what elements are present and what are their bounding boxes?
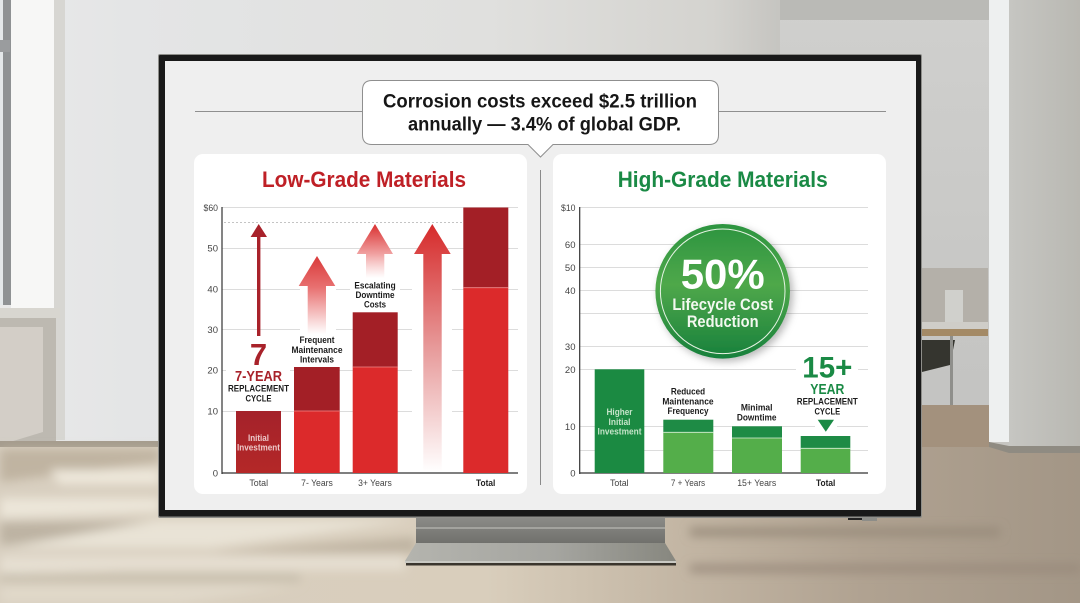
- label: reduced maintenance frequency: Reduced: [671, 386, 705, 396]
- header rule: [195, 110, 886, 112]
- label: escalating downtime costs: Escalating: [354, 280, 396, 290]
- window: [0, 0, 65, 440]
- arrow: maintenance: [299, 256, 335, 334]
- right column: [989, 0, 1080, 453]
- badge: 50% lifecycle cost reduction: Lifecycle Cost: [672, 296, 774, 314]
- callout: 7-year replacement cycle: REPLACEMENT: [228, 384, 289, 394]
- low-grade x axis labels: [249, 478, 495, 489]
- label: escalating downtime costs: [354, 280, 396, 310]
- label: minimal downtime: Downtime: [737, 413, 777, 423]
- callout: 7-year replacement cycle: [228, 337, 289, 404]
- screen: [165, 61, 916, 510]
- low-grade x axis labels: Total: [476, 478, 495, 489]
- center divider: [540, 170, 542, 485]
- label: escalating downtime costs: Downtime: [356, 290, 394, 300]
- rear room: [780, 0, 990, 420]
- high-grade x axis labels: 15+ Years: [737, 478, 776, 489]
- bar: initial investment: Investment: [237, 442, 281, 454]
- bar: 7+ years: [663, 420, 713, 473]
- panel: low-grade materials: [194, 154, 527, 494]
- high-grade x axis labels: [610, 478, 835, 489]
- label: minimal downtime: [737, 403, 777, 423]
- high-grade y axis labels: 60: [565, 240, 576, 251]
- knockout behind labels: [226, 254, 452, 472]
- low-grade x axis labels: 7- Years: [301, 478, 333, 489]
- high-grade y axis labels: 20: [565, 365, 576, 376]
- callout: corrosion cost headline: [362, 80, 718, 157]
- low-grade y axis labels: 10: [207, 406, 218, 418]
- callout: 15+ year replacement cycle: REPLACEMENT: [797, 396, 858, 406]
- high-grade x axis labels: Total: [610, 478, 629, 489]
- callout: 7-year replacement cycle: CYCLE: [246, 394, 272, 404]
- monitor frame: [158, 54, 922, 521]
- high-grade y axis labels: $10: [561, 203, 576, 214]
- high-grade x axis labels: Total: [816, 478, 835, 489]
- high-grade x axis labels: 7 + Years: [671, 478, 705, 489]
- low-grade y axis labels: 20: [207, 366, 218, 376]
- label: frequent maintenance intervals: Intervals: [300, 354, 334, 364]
- low-grade y axis labels: [204, 203, 218, 480]
- callout: 15+ year replacement cycle: [796, 351, 858, 432]
- low-grade gridlines and axis: [222, 207, 518, 474]
- badge: 50% lifecycle cost reduction: Reduction: [687, 313, 759, 331]
- badge: 50% lifecycle cost reduction: [655, 224, 790, 359]
- bar: 3+ years: [353, 312, 398, 473]
- label: frequent maintenance intervals: Maintenance: [292, 345, 342, 355]
- monitor stand: [405, 518, 676, 566]
- bar: initial investment: Initial: [248, 433, 269, 444]
- badge: 50% lifecycle cost reduction: 50%: [681, 250, 765, 298]
- low-grade title: Low-Grade Materials: [262, 167, 466, 192]
- label: escalating downtime costs: Costs: [364, 300, 386, 310]
- bar: 15+ years: [732, 426, 782, 473]
- high-grade gridlines and axis: [580, 207, 868, 474]
- label: reduced maintenance frequency: [662, 386, 714, 416]
- low-grade y axis labels: 0: [213, 468, 218, 480]
- low-grade x axis labels: 3+ Years: [358, 478, 392, 489]
- callout: 15+ year replacement cycle: CYCLE: [814, 406, 840, 416]
- callout: corrosion cost headline: annually — 3.4% of global GDP.: [408, 114, 681, 136]
- bar: higher initial investment: Investment: [598, 427, 642, 438]
- callout: 15+ year replacement cycle: YEAR: [810, 382, 845, 398]
- icon: down triangle: [818, 420, 834, 432]
- bar: total: [463, 208, 508, 473]
- high-grade y axis labels: [561, 203, 576, 480]
- label: reduced maintenance frequency: Maintenance: [662, 396, 714, 406]
- high-grade y axis labels: 0: [570, 468, 576, 480]
- callout: 15+ year replacement cycle: 15+: [802, 351, 852, 384]
- high-grade y axis labels: 30: [565, 342, 576, 353]
- high-grade y axis labels: 10: [565, 422, 576, 433]
- bar: higher initial investment: [595, 369, 644, 473]
- low-grade y axis labels: 50: [207, 244, 218, 254]
- label: frequent maintenance intervals: [292, 335, 342, 364]
- bar: higher initial investment: Initial: [608, 417, 630, 428]
- low-grade y axis labels: 40: [207, 284, 218, 296]
- low-grade x axis labels: Total: [249, 478, 268, 489]
- callout: 7-year replacement cycle: 7: [250, 337, 267, 372]
- arrow: thin replacement cycle arrow: [251, 224, 267, 336]
- callout: 7-year replacement cycle: 7-YEAR: [235, 369, 282, 385]
- low-grade y axis labels: 30: [207, 325, 218, 336]
- high-grade y axis labels: 50: [565, 263, 576, 274]
- label: frequent maintenance intervals: Frequent: [300, 335, 334, 345]
- label: reduced maintenance frequency: Frequency: [668, 406, 708, 416]
- bar: higher initial investment: Higher: [606, 407, 633, 418]
- arrow: downtime: [357, 224, 393, 278]
- label: minimal downtime: Minimal: [741, 403, 773, 413]
- arrow: tall escalation: [414, 224, 451, 472]
- callout: corrosion cost headline: Corrosion costs exceed $2.5 trillion: [383, 91, 697, 113]
- bar: total: [801, 436, 850, 473]
- bar: 7-years: [294, 367, 340, 473]
- bar: initial investment: [236, 411, 281, 473]
- knockout behind labels: [664, 360, 858, 435]
- radiator: [0, 318, 56, 445]
- panel: high-grade materials: [553, 154, 886, 494]
- floor: [0, 405, 1080, 603]
- high-grade title: High-Grade Materials: [618, 167, 828, 192]
- high-grade y axis labels: 40: [565, 286, 576, 297]
- low-grade y axis labels: $60: [204, 203, 218, 214]
